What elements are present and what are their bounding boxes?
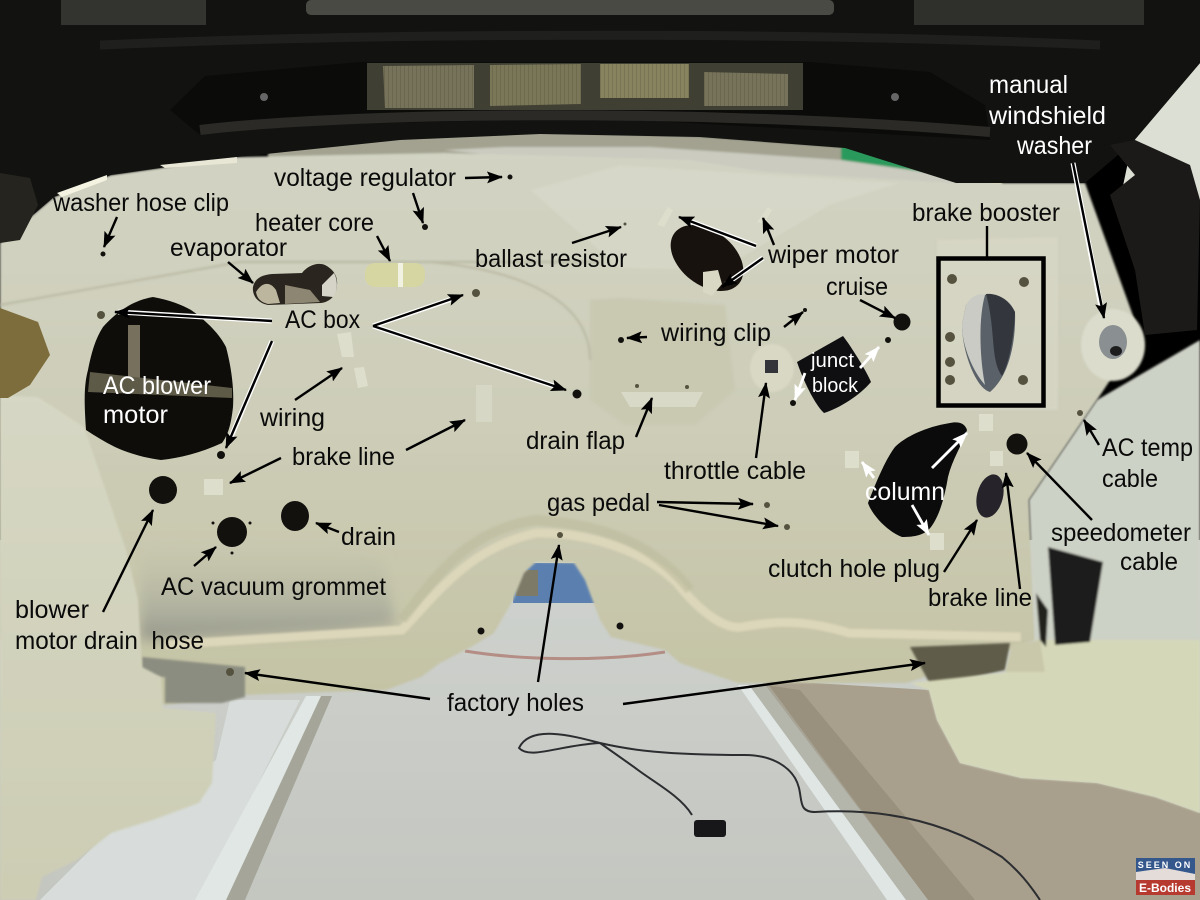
black labels: brake booster <box>912 199 1060 227</box>
white labels: manual <box>989 71 1068 99</box>
arrow halos <box>118 163 1102 444</box>
black labels: wiper motor <box>767 241 899 269</box>
black labels: ballast resistor <box>475 245 627 273</box>
left inner fender <box>0 395 216 900</box>
black labels: AC vacuum grommet <box>161 573 386 601</box>
black labels: brake line <box>292 443 395 471</box>
dark notch under right of firewall <box>910 643 1010 684</box>
black labels: motor drain hose <box>15 627 204 655</box>
black labels: heater core <box>255 209 374 237</box>
floor cable <box>519 734 1040 900</box>
hole: evaporator slot <box>253 264 337 305</box>
hole: heater core slot <box>365 263 425 287</box>
round holes <box>100 174 1028 634</box>
white labels: AC blower <box>103 372 211 400</box>
black labels: wiring <box>259 404 325 432</box>
black labels: gas pedal <box>547 489 650 517</box>
right inner fender <box>910 340 1200 813</box>
white labels: column <box>865 478 945 506</box>
white labels: motor <box>103 401 168 429</box>
white labels: windshield <box>988 102 1106 130</box>
hole: junction block <box>797 336 871 413</box>
black labels: cable <box>1102 465 1158 493</box>
hole: wiper motor <box>658 211 756 305</box>
steel rails on floor <box>195 685 928 900</box>
black labels: drain <box>341 523 396 551</box>
black labels <box>15 164 1193 717</box>
hole: AC blower motor <box>85 297 233 460</box>
washer and throttle grommets <box>765 325 1127 373</box>
hole: clutch plug <box>972 472 1008 520</box>
hole: brake booster <box>962 294 1015 392</box>
black labels: AC temp <box>1102 434 1193 462</box>
white labels: block <box>812 375 859 397</box>
hood underside <box>0 0 1200 243</box>
white labels: washer <box>1016 132 1092 160</box>
firewall panel <box>0 132 1145 705</box>
black labels: factory holes <box>447 689 584 717</box>
white labels <box>103 71 1106 506</box>
brackets and dark parts at edges <box>0 140 1200 398</box>
watermark badge <box>1136 858 1195 895</box>
black labels: brake line <box>928 584 1032 612</box>
black labels: throttle cable <box>664 457 806 485</box>
black labels: washer hose clip <box>52 189 229 217</box>
dark notch under left of firewall <box>142 657 245 703</box>
black labels: speedometer <box>1051 519 1191 547</box>
black labels: cruise <box>826 273 888 301</box>
floor cable plug <box>694 820 726 837</box>
hole: steering column <box>868 422 967 537</box>
muted mounting holes <box>97 222 1083 676</box>
black labels: blower <box>15 596 89 624</box>
white labels: junct <box>810 350 854 372</box>
watermark badge: SEEN ON <box>1138 860 1192 870</box>
black labels: wiring clip <box>660 319 771 347</box>
white arrows <box>795 347 967 535</box>
black labels: cable <box>1120 548 1178 576</box>
black labels: evaporator <box>170 234 287 262</box>
black labels: voltage regulator <box>274 164 456 192</box>
black arrows <box>103 163 1104 704</box>
black labels: AC box <box>285 306 360 334</box>
firewall tabs and brackets <box>204 207 1003 550</box>
watermark badge: E-Bodies <box>1139 881 1191 895</box>
brake booster box <box>938 226 1044 406</box>
black labels: clutch hole plug <box>768 555 940 583</box>
black labels: drain flap <box>526 427 625 455</box>
